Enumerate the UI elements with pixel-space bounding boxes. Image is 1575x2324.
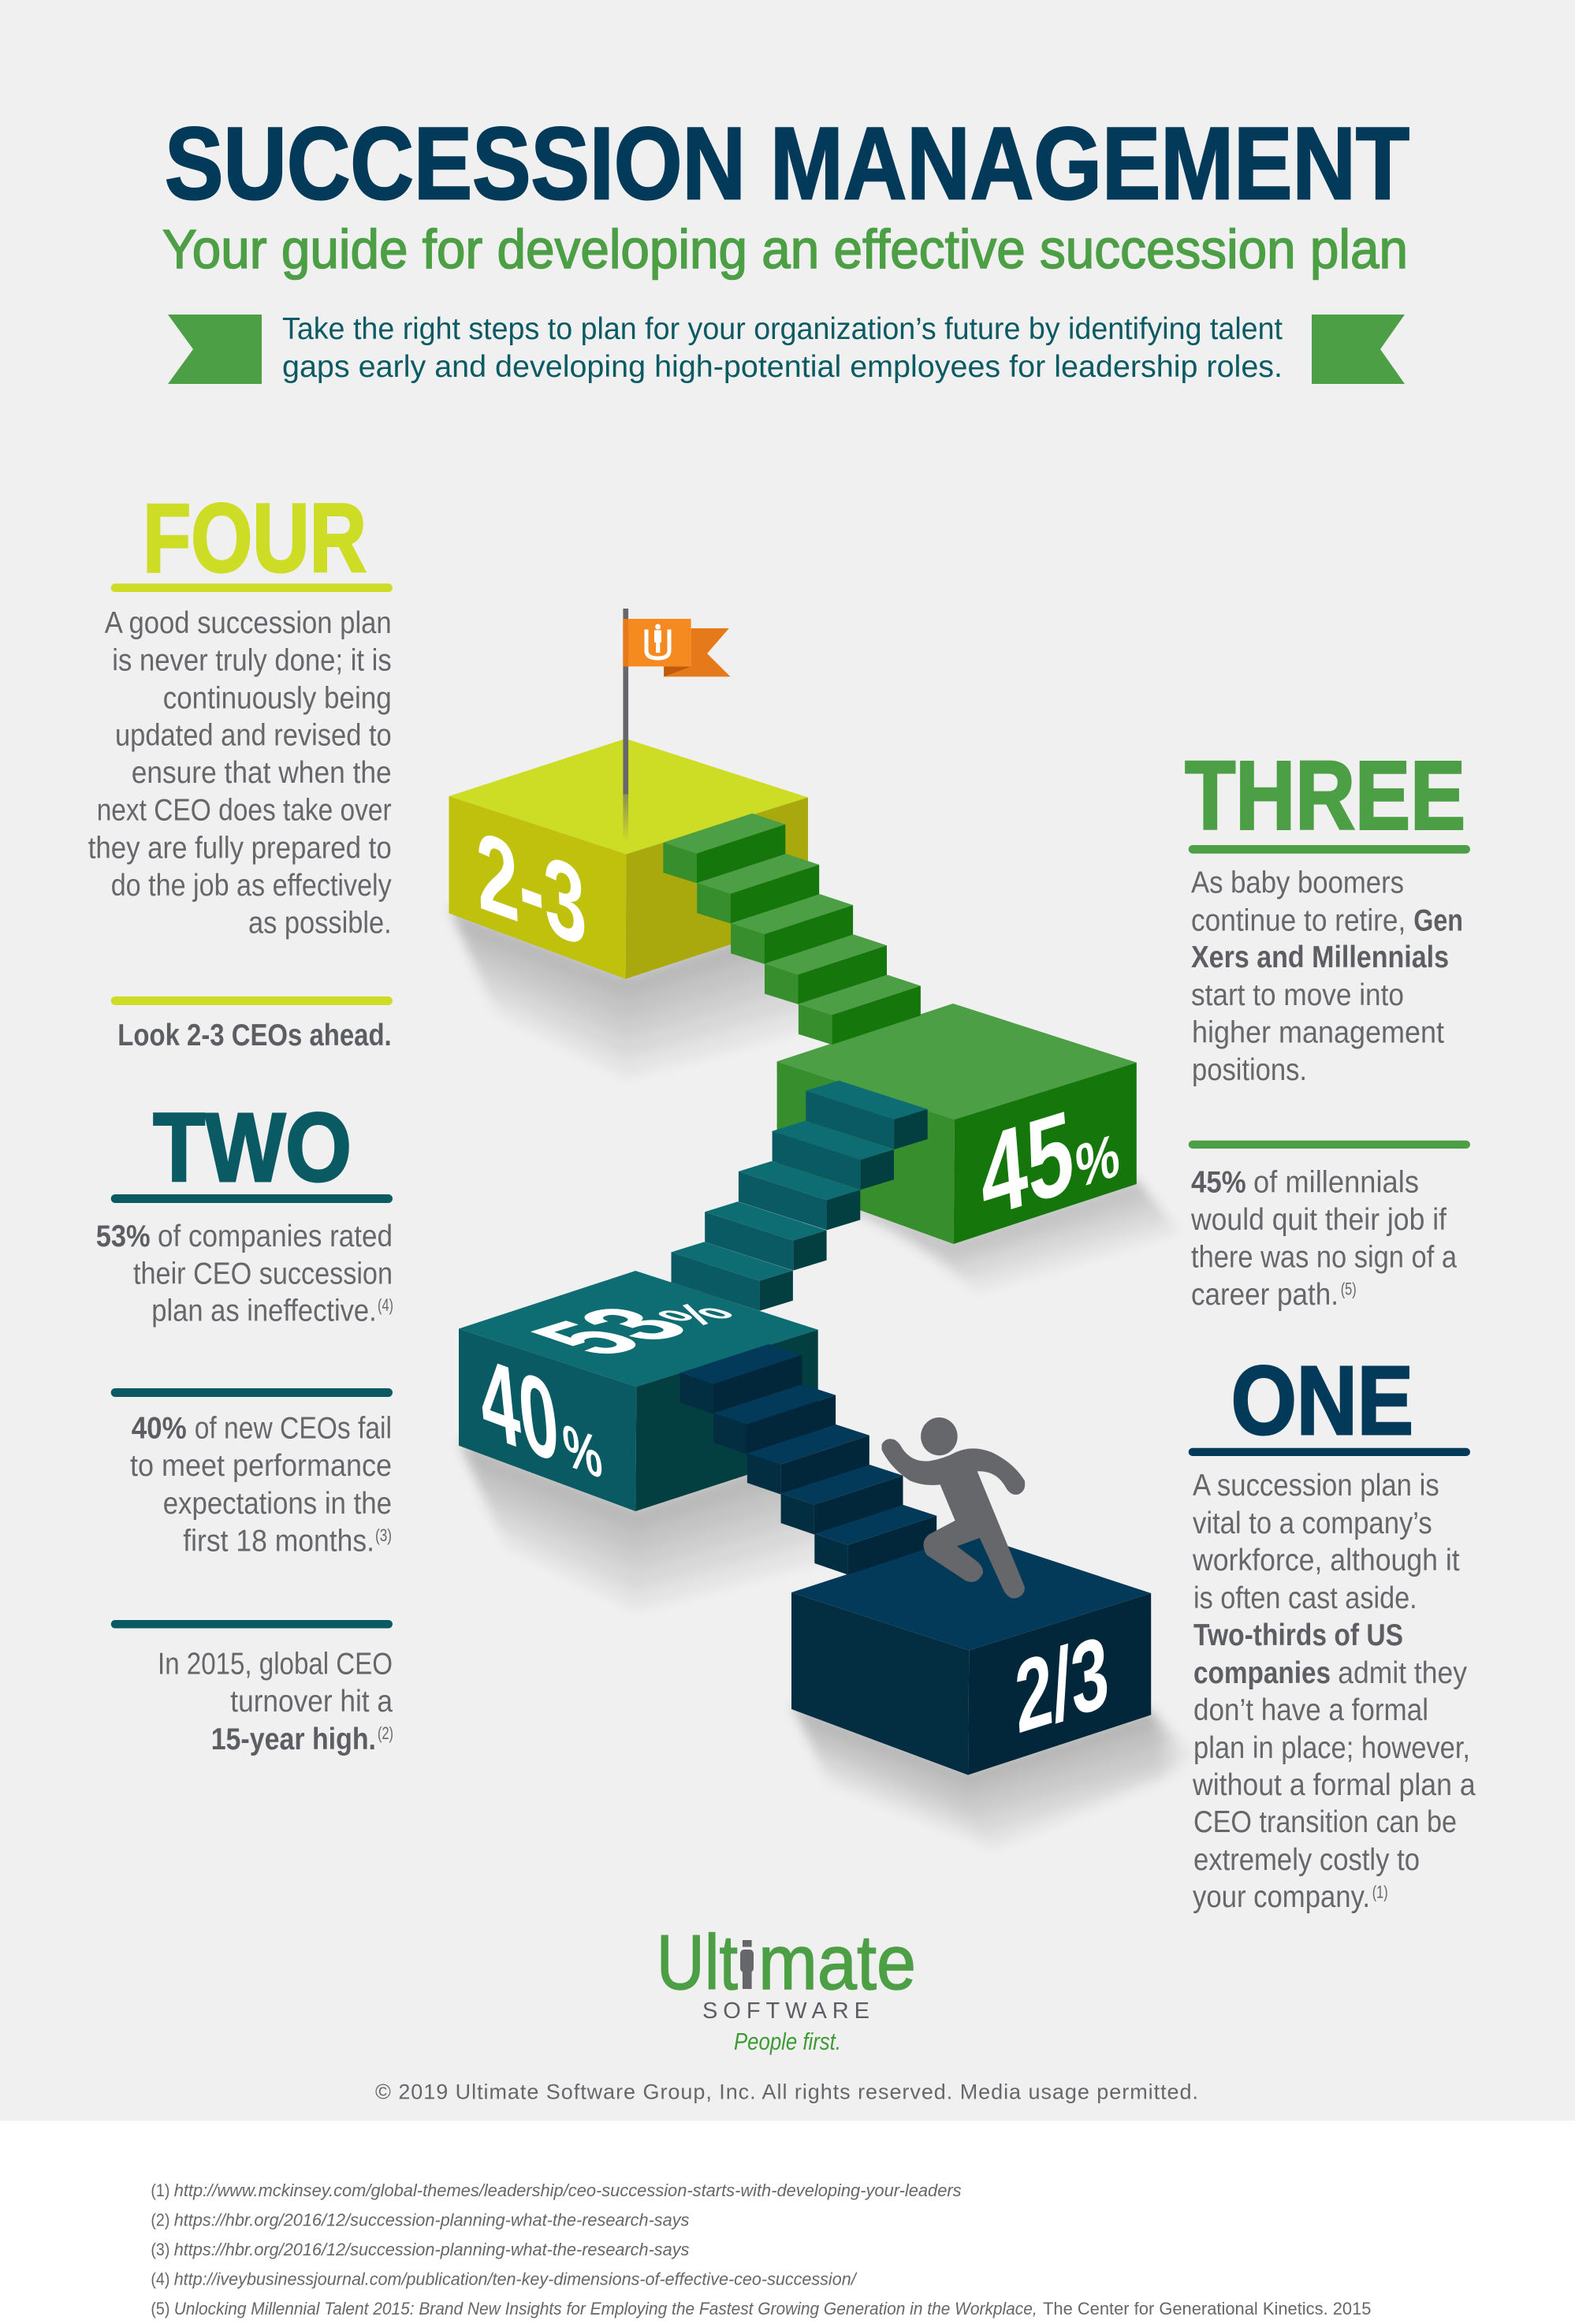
text block: four description: as possible. — [248, 907, 392, 940]
stat: turnover — [158, 1648, 393, 1756]
panel: two — [96, 1094, 393, 1756]
reference 5: Unlocking Millennial Talent 2015: Brand New Insights for Employing the Fastest Growing Generation in the Workplace, — [174, 2299, 1037, 2318]
text block: three description: positions. — [1192, 1053, 1307, 1087]
logo: Ultimate Software: People first. — [734, 2028, 841, 2055]
reference 3: (3) — [151, 2240, 169, 2259]
teal stairs — [672, 1081, 928, 1311]
text block: one description: (1) — [1372, 1883, 1388, 1902]
block number: 45%: 45 — [975, 1085, 1078, 1242]
text block: one description: Two-thirds of US — [1193, 1618, 1403, 1652]
block: four, 2-3 — [449, 739, 808, 979]
icon: left ribbon — [168, 315, 262, 384]
heading: four: FOUR — [143, 485, 367, 593]
divider: four — [111, 996, 393, 1005]
stat: turnover: In 2015, global CEO — [158, 1648, 393, 1681]
stat: 40%: 40% — [132, 1411, 187, 1446]
heading: two: TWO — [153, 1094, 352, 1202]
block: one, 2/3 — [791, 1534, 1151, 1775]
text block: one description: don’t have a formal — [1193, 1693, 1428, 1727]
reference 5: (5) — [151, 2299, 169, 2318]
text block: one description: plan in place; however, — [1193, 1731, 1470, 1765]
stat: 40%: to meet performance — [130, 1449, 392, 1483]
intro text — [282, 312, 1283, 384]
icon: flag — [623, 609, 731, 842]
intro text: Take the right steps to plan for your organization’s future by identifying talent — [282, 312, 1283, 346]
divider: two a — [111, 1388, 393, 1397]
icon: right ribbon — [1312, 315, 1405, 384]
stat: 45%: there was no sign of a — [1191, 1241, 1457, 1275]
underline: two — [111, 1194, 393, 1203]
divider: two b — [111, 1620, 393, 1629]
logo: Ultimate Software — [657, 1919, 916, 2055]
panel: references — [0, 2121, 1575, 2324]
stat: 53%: of companies rated — [158, 1220, 393, 1253]
logo: Ultimate Software: Ult — [657, 1919, 738, 2006]
text block: three description: higher management — [1192, 1016, 1444, 1050]
text block: four description: A good succession plan — [105, 606, 392, 640]
reference 4: (4) — [151, 2269, 169, 2289]
stat: turnover: turnover hit a — [230, 1685, 393, 1719]
underline: one — [1189, 1448, 1470, 1456]
text block: three description: continue to retire, — [1191, 904, 1406, 938]
underline: three — [1189, 845, 1470, 854]
heading: one: ONE — [1231, 1347, 1413, 1455]
stat: 53%: plan as ineffective. — [151, 1294, 377, 1328]
divider: three — [1189, 1141, 1470, 1149]
reference 3: https://hbr.org/2016/12/succession-planning-what-the-research-says — [174, 2240, 689, 2259]
copyright: © 2019 Ultimate Software Group, Inc. All rights reserved. Media usage permitted. — [375, 2080, 1198, 2104]
intro banner — [168, 312, 1405, 384]
text block: one description: is often cast aside. — [1193, 1581, 1417, 1615]
stat: 53%: (4) — [378, 1295, 393, 1315]
panel: one — [1189, 1347, 1476, 1914]
stat: 45%: 45% — [1191, 1166, 1246, 1200]
block: two, 53% and 40% — [459, 1271, 818, 1511]
stat: 45% — [1190, 1166, 1457, 1312]
text block: one description: vital to a company’s — [1193, 1507, 1432, 1540]
text block: three description — [1191, 866, 1463, 1087]
stat: 53%: 53% — [96, 1220, 151, 1253]
text block: four description: updated and revised to — [115, 719, 392, 753]
text block: one description: extremely costly to — [1193, 1843, 1420, 1877]
stat: 40%: (3) — [375, 1525, 392, 1545]
logo: Ultimate Software: mate — [758, 1919, 916, 2006]
text block: four description — [88, 606, 392, 940]
block number: 2/3: 2/3 — [1012, 1613, 1111, 1755]
reference 5: The Center for Generational Kinetics. 2015 — [1043, 2299, 1372, 2318]
block number: 53%: 53 — [501, 1297, 720, 1365]
text block: four description: continuously being — [163, 681, 392, 716]
text block: one description: without a formal plan a — [1192, 1768, 1476, 1802]
intro text: gaps early and developing high-potential employees for leadership roles. — [282, 350, 1283, 384]
block number: 45%: % — [1073, 1120, 1122, 1201]
block shadows — [449, 907, 1193, 1848]
navy stairs — [680, 1344, 936, 1575]
stat: 45%: career path. — [1191, 1278, 1339, 1312]
block: three, 45% — [777, 1004, 1137, 1244]
text block: one description: workforce, although it — [1192, 1544, 1460, 1577]
heading: three: THREE — [1185, 743, 1465, 851]
stat: 45%: (5) — [1341, 1279, 1357, 1299]
green stairs — [663, 814, 921, 1045]
text block: one description: CEO transition can be — [1193, 1805, 1457, 1839]
subtitle: Your guide for developing an effective succession plan — [162, 218, 1408, 280]
text block: four description: is never truly done; it is — [112, 644, 392, 678]
block number: 2-3: 2-3 — [474, 806, 590, 971]
stat: 40%: expectations in the — [163, 1487, 392, 1521]
text block: one description: companies — [1193, 1656, 1331, 1690]
callout: look ahead: Look 2-3 CEOs ahead. — [117, 1019, 392, 1052]
text block: four description: next CEO does take over — [97, 794, 392, 828]
staircase illustration — [449, 609, 1193, 1848]
reference 2: (2) — [151, 2210, 169, 2229]
reference 1: (1) — [151, 2181, 169, 2200]
icon: climbing figure — [882, 1417, 1025, 1599]
reference 4: http://iveybusinessjournal.com/publication/ten-key-dimensions-of-effective-ceo-succession/ — [174, 2269, 858, 2289]
block number: 40%: % — [560, 1411, 605, 1492]
text block: one description: your company. — [1193, 1880, 1370, 1914]
stat: 40%: first 18 months. — [183, 1525, 374, 1558]
stat: 53% — [96, 1220, 393, 1328]
underline: four — [111, 583, 393, 592]
title: SUCCESSION MANAGEMENT — [165, 106, 1409, 221]
text block: three description: As baby boomers — [1191, 866, 1404, 900]
logo: Ultimate Software: SOFTWARE — [702, 1998, 869, 2024]
text block: three description: Gen — [1413, 904, 1463, 938]
text block: four description: do the job as effectively — [111, 869, 392, 903]
stat: 53%: their CEO succession — [133, 1257, 393, 1291]
text block: three description: start to move into — [1191, 978, 1404, 1012]
panel: three — [1185, 743, 1470, 1312]
text block: four description: they are fully prepared to — [88, 831, 392, 866]
text block: one description: admit they — [1338, 1656, 1467, 1690]
stat: 40% — [130, 1411, 392, 1558]
stat: turnover: 15-year high. — [211, 1723, 376, 1756]
text block: three description: Xers and Millennials — [1191, 940, 1449, 974]
panel: four — [88, 485, 393, 1052]
stat: 45%: would quit their job if — [1190, 1203, 1447, 1237]
stat: turnover: (2) — [378, 1723, 393, 1743]
text block: one description: A succession plan is — [1193, 1469, 1439, 1503]
stat: 40%: of new CEOs fail — [195, 1411, 392, 1446]
stat: 45%: of millennials — [1253, 1166, 1419, 1200]
block number: 53%: % — [640, 1298, 751, 1332]
logo: Ultimate Software: i — [738, 1929, 757, 2004]
block number: 40%: 40 — [474, 1331, 564, 1488]
reference 2: https://hbr.org/2016/12/succession-planning-what-the-research-says — [174, 2210, 689, 2229]
reference 1: http://www.mckinsey.com/global-themes/leadership/ceo-succession-starts-with-developing-your-leaders — [174, 2181, 962, 2200]
text block: one description — [1192, 1469, 1476, 1914]
text block: four description: ensure that when the — [132, 756, 392, 790]
